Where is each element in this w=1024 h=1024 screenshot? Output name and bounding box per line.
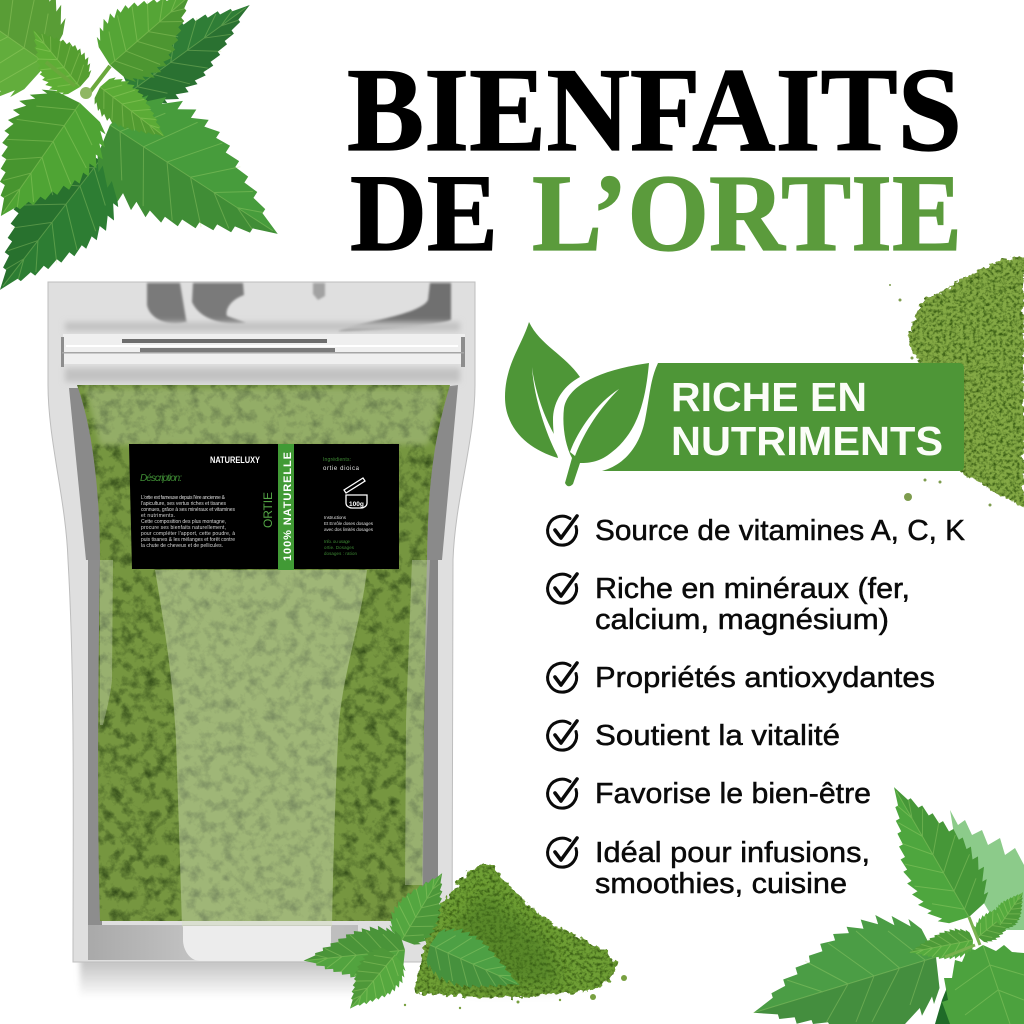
product label: et nutriments. [141, 513, 175, 519]
side sheen strips [100, 560, 113, 725]
window clear base [183, 926, 331, 961]
upper window light band [85, 388, 445, 445]
product label: 100% NATURELLE [282, 452, 294, 561]
product label: L'ortie est fameuse depuis l'ère ancienne & [141, 495, 226, 501]
product label: connues, grâce à ses minéraux et vitamines [141, 507, 236, 513]
product label: Ingrédients: [323, 457, 351, 463]
title: L’ORTIE [532, 152, 962, 274]
tin icon [344, 478, 367, 508]
tin icon: 100g [349, 501, 364, 508]
item: vitamines: Source de vitamines A, C, K [595, 515, 966, 547]
product label: la chute de cheveux et de pellicules. [141, 543, 223, 549]
banner text: RICHE EN [671, 374, 867, 420]
banner text: NUTRIMENTS [671, 418, 943, 464]
nettle leaves: top left [0, 0, 310, 319]
pouch body [48, 282, 475, 962]
pouch top reflections [147, 283, 451, 331]
product label: ortie. Dosages [324, 545, 355, 550]
powder: right edge pile [889, 258, 1024, 508]
product label: Et Enrôle doses dosages [324, 521, 374, 526]
product label: Info. ou usage [324, 539, 351, 544]
item: minéraux: calcium, magnésium) [595, 604, 889, 636]
product label: puis tisanes & les mélanges et forêt contre [141, 537, 235, 543]
pouch shadow [80, 958, 370, 998]
pouch crimp bands [65, 322, 460, 382]
nettle leaves: bottom right [753, 768, 1024, 1024]
icon: leaf right [563, 363, 649, 486]
item: minéraux [548, 573, 910, 636]
product label: l'apiculture, ses vertus riches et tisanes [141, 501, 226, 507]
product label: Instructions [324, 515, 347, 520]
item: infusions: Idéal pour infusions, [595, 837, 870, 869]
pouch side folds [69, 385, 458, 960]
title: DE [350, 152, 498, 274]
product label: Déscription: [140, 473, 182, 484]
product label: procure ses bienfaits naturellement, [141, 525, 226, 531]
icon: leaf left [505, 322, 580, 458]
product label: NATURELUXY [210, 455, 260, 465]
banner text [671, 374, 943, 464]
banner [602, 363, 964, 471]
item: antioxydantes: Propriétés antioxydantes [595, 662, 935, 694]
icon: leaf left vein [532, 367, 566, 460]
product label: avec dos limités dosages [324, 527, 374, 532]
product label: ORTIE [261, 492, 275, 528]
product pouch [48, 282, 475, 998]
badge: riche en nutriments [505, 322, 964, 486]
central transparent window [155, 570, 367, 927]
benefits list [548, 515, 966, 900]
icon: leaf right vein [570, 389, 619, 456]
product label: dosages : ration [324, 551, 358, 556]
item: infusions [548, 837, 870, 900]
powder inside pouch [77, 385, 450, 921]
product label [129, 444, 399, 570]
product label: ortie dioica [323, 466, 360, 472]
product label: Cette composition des plus montagne, [141, 519, 226, 525]
item: minéraux: Riche en minéraux (fer, [595, 573, 910, 605]
powder heap with leaves [301, 861, 627, 1024]
pouch zip seal [61, 334, 465, 367]
item: bien-être: Favorise le bien-être [595, 778, 871, 810]
title [347, 43, 962, 274]
title: BIENFAITS [347, 43, 962, 176]
product label: pour compléter l'apport, cette poudre, à [141, 531, 235, 537]
item: vitalité: Soutient la vitalité [595, 720, 840, 752]
item: infusions: smoothies, cuisine [595, 868, 847, 900]
